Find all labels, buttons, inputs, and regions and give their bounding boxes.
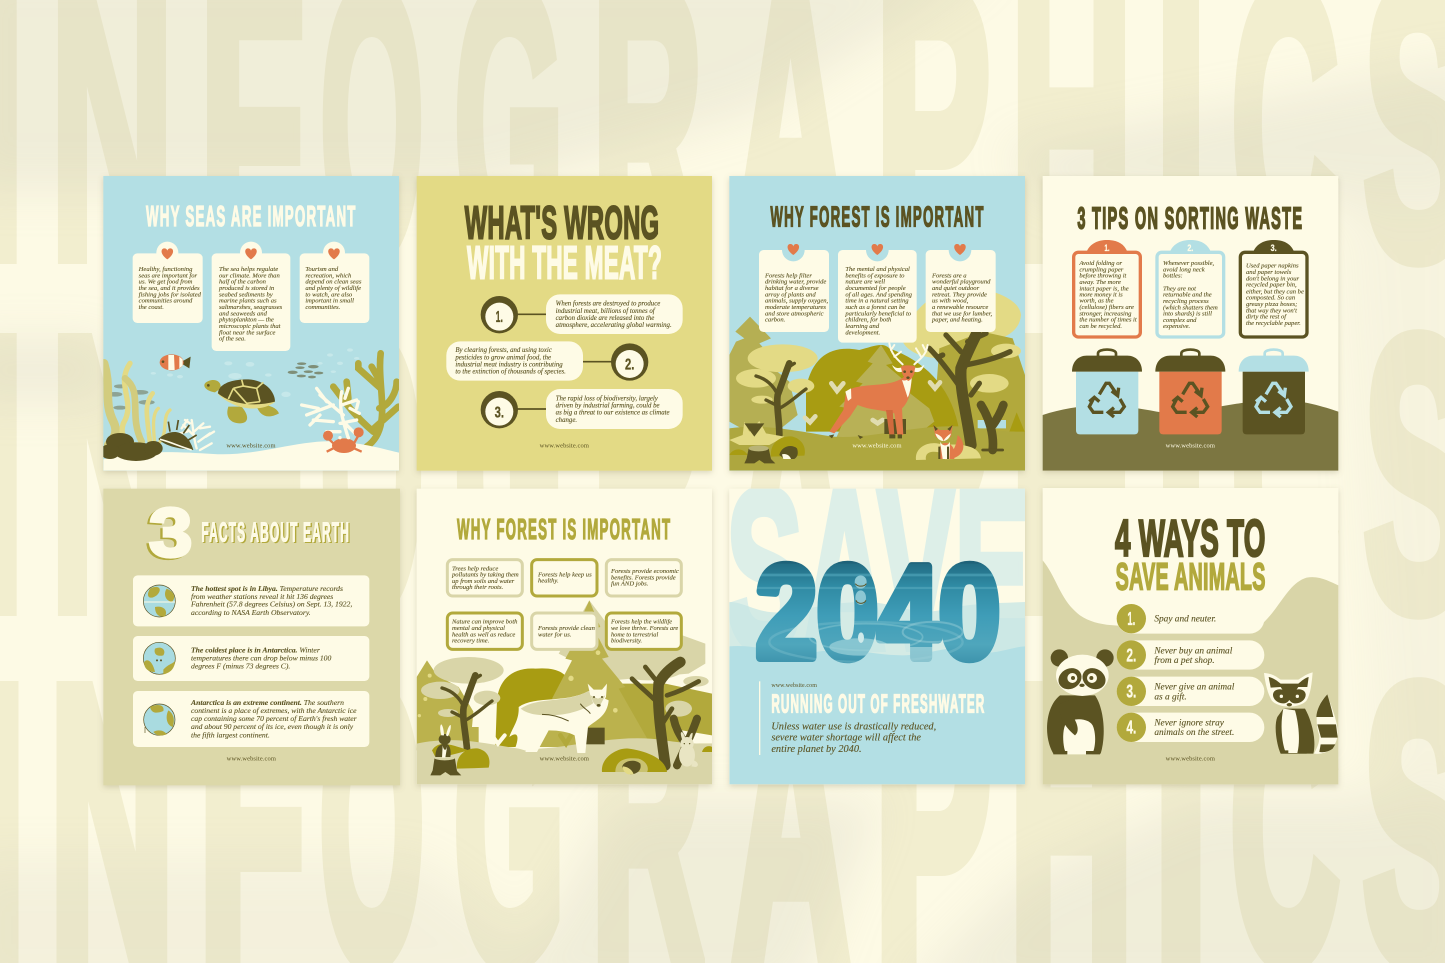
tip 2: bottles:: [1163, 273, 1183, 280]
white coral left: [180, 420, 214, 450]
tip 2: (which shatters them: [1163, 304, 1218, 311]
step 1: carbon dioxide are released into the: [556, 315, 654, 322]
step 3: 3.: [495, 404, 504, 421]
panel: 3 tips on sorting waste: [1043, 176, 1338, 471]
panel: what's wrong with the meat: [417, 176, 712, 471]
icon: earth sad: [144, 704, 175, 735]
tip 3: recycled paper bin,: [1246, 282, 1297, 289]
tip 3: 3.: [1271, 243, 1277, 253]
panel: 4 ways to save animals: [1043, 488, 1338, 784]
card: healthy seas: [133, 242, 203, 323]
website: www.website.com: [771, 683, 817, 689]
card: climate regulation: saltmarshes, seagrasses: [219, 304, 283, 311]
card: climate regulation: our climate. More than: [219, 272, 280, 279]
box: wildlife: biodiversity.: [611, 638, 643, 645]
background with giant INFOGRAPHICS lettering: G: [454, 258, 564, 691]
step 2: 2.: [625, 357, 634, 374]
background with giant INFOGRAPHICS lettering: I: [1154, 258, 1208, 691]
back wave: [730, 602, 1025, 656]
step 2: By clearing forests, and using toxic: [455, 347, 552, 354]
step 2: industrial meat industry is contributing: [455, 361, 563, 368]
olive coral right: [333, 353, 398, 447]
box: wildlife: [606, 613, 681, 649]
tip 3: composted. So can: [1246, 295, 1296, 302]
website: www.website.com: [852, 442, 902, 449]
way 2: 2.: [1126, 644, 1136, 665]
white coral right: [302, 388, 359, 438]
background with giant INFOGRAPHICS lettering: A: [732, 258, 849, 691]
box: clean water: water for us.: [538, 631, 572, 638]
deer: [829, 343, 928, 439]
box: healthy: healthy.: [538, 578, 559, 585]
card: playground: and quiet outdoor: [932, 285, 980, 292]
background with giant INFOGRAPHICS lettering: P: [875, 258, 991, 691]
front water: [729, 646, 1025, 784]
card: filter water: habitat for a diverse: [765, 285, 819, 292]
fact: coldest: [133, 636, 369, 681]
box: wildlife: Forests help the wildlife: [610, 619, 672, 626]
tip 1: more money it is: [1079, 292, 1123, 299]
description: Unless water use is drastically reduced,: [771, 722, 936, 733]
trees: [442, 662, 699, 765]
olive forest landscape: [417, 600, 712, 784]
card: mental and physical benefits: learning and: [845, 323, 880, 330]
card: filter water: and store atmospheric: [765, 310, 824, 317]
card: mental and physical benefits: children, for both: [845, 317, 892, 324]
way 1: [1117, 604, 1264, 634]
step 3: change.: [556, 417, 577, 424]
tip 2: recycling process: [1163, 298, 1209, 305]
card: climate regulation: and seaweeds and: [219, 310, 268, 317]
number 2040 with water fill: 2040: [756, 538, 1000, 685]
background with giant INFOGRAPHICS lettering: R: [592, 258, 703, 691]
way 4: 4.: [1126, 717, 1136, 738]
background with giant INFOGRAPHICS lettering: H: [1010, 258, 1133, 691]
rocks: [100, 433, 163, 461]
box: economic: fun AND jobs.: [611, 581, 649, 588]
background with giant INFOGRAPHICS lettering: O: [320, 258, 424, 691]
card: tourism: depend on clean seas: [305, 279, 362, 286]
SAVE backdrop lettering: SAVE: [726, 444, 1031, 697]
box: healthy: [532, 560, 597, 596]
fact: hottest: Fahrenheit (57.8 degrees Celsius) on Sept. 13, 1922,: [190, 600, 352, 609]
card: healthy seas: the sea, and it provides: [139, 285, 200, 292]
shell: [158, 420, 197, 450]
box: pollutants: Trees help reduce: [452, 565, 498, 572]
foliage: [736, 344, 1021, 404]
tip 1: intact paper is, the: [1079, 285, 1129, 292]
website: www.website.com: [227, 756, 276, 763]
panel: 2040 running out of freshwater: [727, 488, 1028, 788]
card: mental and physical benefits: documented for people: [845, 285, 906, 292]
way 2: Never buy an animal: [1153, 646, 1233, 656]
tip 3: greasy pizza boxes;: [1246, 301, 1297, 308]
fish school right: [288, 362, 323, 378]
panel: why seas are important: [100, 176, 399, 471]
accent line: [759, 681, 760, 755]
box: clean water: [532, 613, 597, 649]
card: healthy seas: us. We get food from: [139, 279, 193, 286]
box: recovery: mental and physical: [452, 625, 505, 632]
fish school left: [108, 384, 155, 410]
title: [1115, 509, 1266, 599]
box: recovery: recovery time.: [452, 638, 490, 645]
tip 3: the recyclable paper.: [1246, 320, 1301, 327]
tip 2: [1157, 240, 1224, 337]
card: climate regulation: seabed sediments by: [219, 291, 273, 298]
bin: dark: [1239, 350, 1309, 434]
step 1: atmosphere, accelerating global warming.: [556, 322, 672, 329]
card: healthy seas: the coast.: [139, 304, 164, 311]
step 3: as big a threat to our existence as climate: [556, 410, 670, 417]
tip 3: dirty the rest of: [1246, 314, 1287, 321]
way 4: [1117, 713, 1264, 742]
title: [147, 495, 351, 573]
card: playground: a renewable resource: [932, 304, 988, 311]
bin: blue: [1072, 350, 1142, 434]
card: climate regulation: [212, 242, 290, 351]
step 1: 1.: [496, 309, 503, 326]
card: mental and physical benefits: nature are well: [845, 279, 885, 286]
tip 2: complex and: [1163, 317, 1197, 324]
rabbit right: [679, 732, 698, 767]
tip 2: expensive.: [1163, 323, 1191, 330]
card: filter water: array of plants and: [765, 291, 816, 298]
fact: coldest: degrees F (minus 73 degrees C).: [191, 662, 290, 671]
background with giant INFOGRAPHICS lettering: N: [50, 258, 174, 691]
hill: [1043, 400, 1338, 471]
card: filter water: moderate temperatures: [765, 304, 826, 311]
tip 1: away. The more: [1079, 279, 1121, 286]
card: healthy seas: Healthy, functioning: [138, 266, 193, 273]
bubbles and pale fish: [151, 348, 359, 397]
box: recovery: health as well as reduce: [452, 631, 515, 638]
card: playground: us with wood,: [932, 298, 969, 305]
card: mental and physical benefits: benefits of exposure to: [845, 272, 905, 279]
panel: why forest is important, blue: [729, 176, 1025, 471]
panel: 3 facts about earth: [103, 489, 400, 785]
icon: earth hot: [143, 585, 175, 617]
tip 2: avoid long neck: [1163, 266, 1206, 273]
description: entire planet by 2040.: [771, 744, 862, 755]
way 2: from a pet shop.: [1154, 655, 1215, 666]
box: recovery: [447, 613, 522, 649]
card: mental and physical benefits: development.: [845, 329, 881, 336]
step 2: [446, 341, 648, 381]
panda: [1047, 649, 1114, 754]
step 3: The rapid loss of biodiversity, largely: [556, 395, 659, 402]
fact: extreme: and about 90 percent of its ice, even though it is only: [191, 722, 354, 731]
box: pollutants: through their roots.: [452, 584, 504, 591]
tip 3: Used paper napkins: [1246, 263, 1299, 270]
tip 2: returnable and the: [1163, 292, 1212, 299]
card: tourism: recreation, which: [305, 272, 352, 279]
panel: why seas are important: WHY SEAS ARE IMPORTANT: [146, 201, 357, 233]
card: tourism: and plenty of wildlife: [305, 285, 361, 292]
tree stump: [744, 445, 775, 463]
card: tourism: [300, 242, 369, 323]
tip 1: worth, as the: [1079, 298, 1114, 305]
description: severe water shortage will affect the: [771, 733, 921, 744]
tip 2: into shards) is still: [1163, 311, 1212, 318]
card: tourism: to watch, are also: [305, 291, 353, 298]
sand: [103, 441, 399, 471]
website: www.website.com: [1166, 756, 1215, 763]
box: wildlife: we love thrive. Forests are: [611, 625, 678, 632]
sea turtle: [204, 379, 279, 423]
step 3: driven by industrial farming, could be: [556, 403, 660, 410]
card: climate regulation: marine plants such as: [219, 298, 277, 305]
fact: coldest: The coldest place is in Antarctica. Winter: [191, 646, 320, 655]
fact: extreme: [133, 691, 369, 747]
way 2: [1117, 640, 1264, 670]
panel: why forest is important, wolf: [417, 489, 712, 784]
clownfish: [160, 354, 191, 370]
water drops: [855, 575, 867, 643]
tip 2: Whenever possible,: [1163, 260, 1215, 267]
fact: extreme: Antarctica is an extreme continent. The southern: [191, 698, 344, 707]
card: mental and physical benefits: of all ages. And spending: [845, 291, 913, 298]
step 1: When forests are destroyed to produce: [556, 301, 660, 308]
box: recovery: Nature can improve both: [451, 619, 518, 626]
raccoon: [1264, 672, 1338, 754]
fact: extreme: continent is a place of extremes, with the Antarctic ice: [191, 706, 357, 715]
tip 1: Avoid folding or: [1078, 260, 1123, 267]
card: healthy seas: fishing jobs for isolated: [139, 291, 202, 298]
hedgehog: [779, 446, 798, 459]
fact: extreme: the fifth largest continent.: [191, 730, 270, 739]
panel: why forest is important, wolf: WHY FOREST IS IMPORTANT: [457, 514, 671, 546]
forest landscape: [729, 285, 1025, 471]
crab: [323, 427, 364, 453]
box: pollutants: up from soils and water: [452, 578, 515, 585]
panel: what's wrong with the meat: WITH THE MEAT?: [467, 236, 662, 288]
fact: hottest: [133, 575, 369, 626]
tip 2: They are not: [1163, 285, 1196, 292]
card: climate regulation: produced is stored in: [218, 285, 275, 292]
tip 3: that way they won't: [1246, 307, 1297, 314]
hedgehog: [622, 761, 641, 774]
box: economic: benefits. Forests provide: [611, 575, 676, 582]
wolf: [509, 684, 609, 753]
card: filter water: animals, supply oxygen,: [765, 298, 829, 305]
panel: 3 facts about earth: FACTS ABOUT EARTH: [203, 518, 351, 549]
title: WHAT'S WRONG: [465, 196, 659, 248]
ground: [729, 426, 1025, 471]
card: playground: paper, and heating.: [931, 317, 983, 324]
website: www.website.com: [540, 442, 589, 449]
tip 1: [1074, 240, 1140, 337]
tip 1: before throwing it: [1079, 273, 1127, 280]
rabbit on stump: [430, 724, 461, 775]
tip 1: (cellulose) fibers are: [1079, 304, 1134, 311]
card: mental and physical benefits: [838, 244, 917, 343]
card: playground: that we use for lumber,: [932, 310, 992, 317]
panel: 3 facts about earth: FACTS ABOUT EARTH: [201, 517, 350, 548]
card: tourism: important in small: [305, 298, 354, 305]
way 3: Never give an animal: [1153, 682, 1235, 692]
khaki background shape: [1043, 560, 1338, 784]
tip 1: can be recycled.: [1079, 323, 1122, 330]
seaweed left: [104, 363, 170, 455]
ground: [417, 738, 712, 784]
tip 3: either, but they can be: [1246, 288, 1304, 295]
website: www.website.com: [1166, 442, 1215, 449]
box: healthy: Forests help keep us: [537, 571, 592, 578]
box: economic: [606, 560, 681, 596]
tip 2: 2.: [1187, 243, 1193, 253]
card: climate regulation: half of the carbon: [219, 279, 267, 286]
title: 4 WAYS TO: [1115, 509, 1266, 567]
card: tourism: communities.: [305, 304, 341, 311]
way 1: 1.: [1127, 608, 1135, 629]
website: www.website.com: [540, 756, 589, 763]
card: filter water: drinking water, provide: [765, 279, 826, 286]
title: [465, 196, 662, 288]
card: mental and physical benefits: particularly beneficial to: [844, 310, 912, 317]
step 2: to the extinction of thousands of species.: [455, 369, 566, 376]
card: climate regulation: float near the surface: [219, 329, 276, 336]
background with giant INFOGRAPHICS lettering: F: [199, 258, 305, 691]
fact: extreme: cap containing some 70 percent of Earth's fresh water: [191, 714, 357, 723]
way 3: as a gift.: [1154, 691, 1187, 702]
website: www.website.com: [226, 442, 276, 449]
icon: earth cold: [143, 642, 175, 674]
card: healthy seas: seas are important for: [139, 272, 198, 279]
tip 3: [1240, 240, 1307, 337]
tip 1: 1.: [1104, 243, 1109, 253]
box: clean water: Forests provide clean: [537, 625, 596, 632]
step 1: [481, 294, 683, 334]
card: climate regulation: of the sea.: [219, 336, 246, 343]
card: playground: wonderful playground: [932, 279, 991, 286]
panel: 2040 running out of freshwater: RUNNING OUT OF FRESHWATER: [771, 689, 985, 719]
card: playground: Forests are a: [931, 272, 967, 279]
step 2: pesticides to grow animal food, the: [454, 354, 551, 361]
card: playground: [926, 244, 996, 332]
bushes: [457, 748, 489, 769]
tip 3: don't belong in your: [1246, 275, 1300, 282]
tip 1: the number of times it: [1079, 317, 1137, 324]
step 3: [481, 389, 683, 429]
card: climate regulation: The sea helps regulate: [219, 266, 278, 273]
way 3: 3.: [1126, 681, 1136, 702]
card: playground: retreat. They provide: [932, 291, 987, 298]
fact: hottest: The hottest spot is in Libya. Temperature records: [191, 584, 343, 593]
card: filter water: Forests help filter: [764, 272, 812, 279]
title: 3: [147, 497, 190, 573]
plants and bush: [729, 421, 784, 445]
card: mental and physical benefits: The mental and physical: [845, 266, 910, 273]
tip 1: stronger, increasing: [1079, 310, 1132, 317]
fact: coldest: temperatures there can drop below minus 100: [191, 654, 332, 663]
step 1: industrial meat, billions of tonnes of: [556, 308, 656, 315]
tip 3: and paper towels: [1246, 269, 1292, 276]
fact: hottest: according to NASA Earth Observatory.: [191, 608, 311, 617]
tip 1: crumpling paper: [1079, 266, 1124, 273]
card: climate regulation: phytoplankton — the: [218, 317, 274, 324]
way 1: Spay and neuter.: [1154, 615, 1216, 625]
way 4: animals on the street.: [1154, 728, 1234, 738]
fact: hottest: from weather stations reveal it hit 136 degrees: [191, 592, 333, 601]
way 4: Never ignore stray: [1153, 718, 1225, 728]
way 3: [1117, 677, 1264, 706]
card: mental and physical benefits: such as a forest can be: [845, 304, 905, 311]
bin: orange: [1155, 350, 1225, 434]
box: wildlife: home to terrestrial: [611, 631, 658, 638]
trees: [756, 333, 1010, 450]
card: climate regulation: microscopic plants that: [219, 323, 281, 330]
card: filter water: carbon.: [765, 317, 786, 324]
title: 3: [149, 495, 192, 571]
card: healthy seas: communities around: [139, 298, 193, 305]
panel: why forest is important, blue: WHY FOREST IS IMPORTANT: [770, 202, 985, 234]
card: filter water: [759, 244, 829, 332]
box: pollutants: [447, 560, 522, 596]
box: pollutants: pollutants by taking them: [451, 572, 519, 579]
box: economic: Forests provide economic: [610, 568, 679, 575]
card: mental and physical benefits: time in a natural setting: [845, 298, 909, 305]
fox: [933, 425, 963, 459]
card: tourism: Tourism and: [305, 266, 339, 273]
title: SAVE ANIMALS: [1116, 557, 1266, 599]
